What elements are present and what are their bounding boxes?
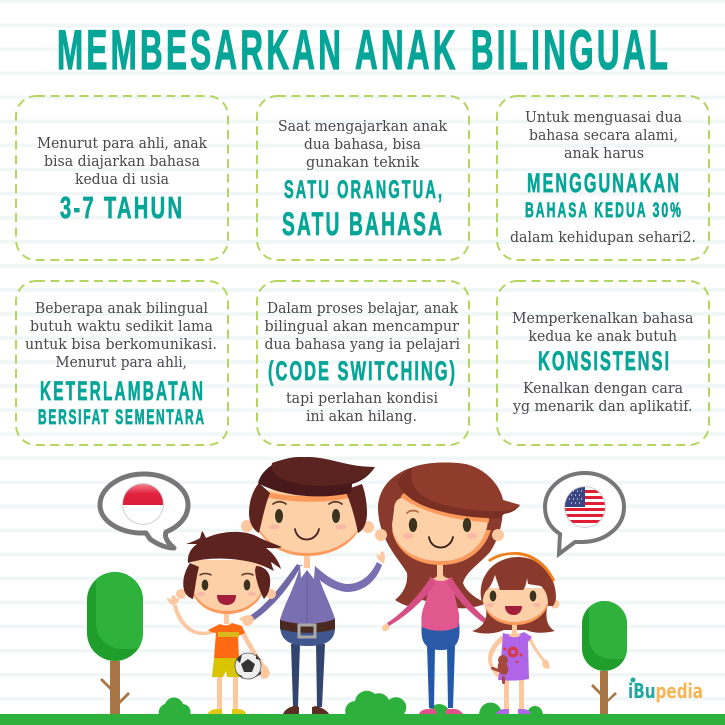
panel: keterlambatan: butuh waktu sedikit lama [30,319,213,335]
panel: bahasa kedua 30 persen: MENGGUNAKAN [527,168,679,198]
icon: flower on dress [504,646,522,663]
panel: bahasa kedua 30 persen: dalam kehidupan sehari2. [510,230,696,246]
panel: keterlambatan: Menurut para ahli, [56,355,187,371]
panel: code switching: (CODE SWITCHING) [268,356,455,386]
icon: American flag [564,486,606,528]
icon: right tree [582,601,627,714]
mother legs and shoes [419,645,463,714]
mother head [375,463,520,581]
speech bubble: Indonesia [100,474,188,548]
mother trousers [421,622,460,650]
girl legs and shoes [496,678,531,714]
panel: konsistensi: kedua ke anak butuh [528,329,677,345]
illustration: girl [472,552,560,714]
boy head [176,531,282,624]
mother back hair [378,463,503,608]
boy shorts [212,658,240,677]
panel: teknik mengajar [257,96,469,260]
illustration: boy [167,531,282,714]
panel: keterlambatan [16,281,228,445]
panel: usia belajar: bisa diajarkan bahasa [44,154,200,170]
panel: usia belajar: 3-7 TAHUN [60,190,182,225]
ground [0,714,725,725]
boy legs and shoes [208,675,246,714]
panel: teknik mengajar: SATU BAHASA [282,206,442,242]
mother top and arms [382,577,499,633]
panel: code switching [257,281,469,445]
panel: konsistensi: yg menarik dan aplikatif. [512,399,692,415]
illustration: father [239,457,385,714]
panel: usia belajar [16,96,228,260]
logo: iBupedia [628,679,703,703]
panel: bahasa kedua 30 persen: anak harus [564,146,644,162]
icon: soccer ball [235,653,261,679]
panel: code switching: dua bahasa yang ia pelajari [264,337,460,353]
title: MEMBESARKAN ANAK BILINGUAL [57,18,668,81]
panel: usia belajar: kedua di usia [75,172,169,188]
panel: teknik mengajar: gunakan teknik [306,155,419,171]
panel: keterlambatan: BERSIFAT SEMENTARA [38,406,204,429]
girl dress and arms [488,632,550,681]
panel: konsistensi: KONSISTENSI [538,346,669,376]
icon: Indonesian flag [122,483,164,525]
panel: bahasa kedua 30 persen: Untuk menguasai dua [525,110,682,126]
panel: usia belajar: Menurut para ahli, anak [37,136,207,152]
panel: code switching: bilingual akan mencampur [264,319,459,335]
father legs and shoes [283,644,329,714]
father trousers and belt [280,618,335,646]
panel: teknik mengajar: SATU ORANGTUA, [284,177,442,204]
panel: code switching: tapi perlahan kondisi [286,391,438,407]
bushes [159,691,543,715]
icon: left tree [87,572,143,714]
illustration: mother [375,463,520,714]
panel: bahasa kedua 30 persen: bahasa secara alami, [529,128,678,144]
panel: bahasa kedua 30 persen: BAHASA KEDUA 30% [525,197,681,222]
father head [241,457,375,568]
panel: bahasa kedua 30 persen [497,96,709,260]
panel: konsistensi: Memperkenalkan bahasa [512,311,694,327]
panel: code switching: Dalam proses belajar, anak [267,301,458,317]
panel: keterlambatan: untuk bisa berkomunikasi. [25,337,217,353]
panel: teknik mengajar: Saat mengajarkan anak [278,119,447,135]
panel: teknik mengajar: dua bahasa, bisa [304,137,421,153]
panel: konsistensi [497,281,709,445]
speech bubble: United States [545,473,624,554]
girl lower hair [472,604,555,634]
father shirt and arms [239,551,385,626]
panel: keterlambatan: Beberapa anak bilingual [35,301,208,317]
boy shirt and arms [167,595,270,679]
icon: teddy bear [491,655,510,684]
panel: code switching: ini akan hilang. [306,409,417,425]
girl head [481,552,560,637]
panel: konsistensi: Kenalkan dengan cara [523,381,683,397]
panel: keterlambatan: KETERLAMBATAN [40,375,203,406]
